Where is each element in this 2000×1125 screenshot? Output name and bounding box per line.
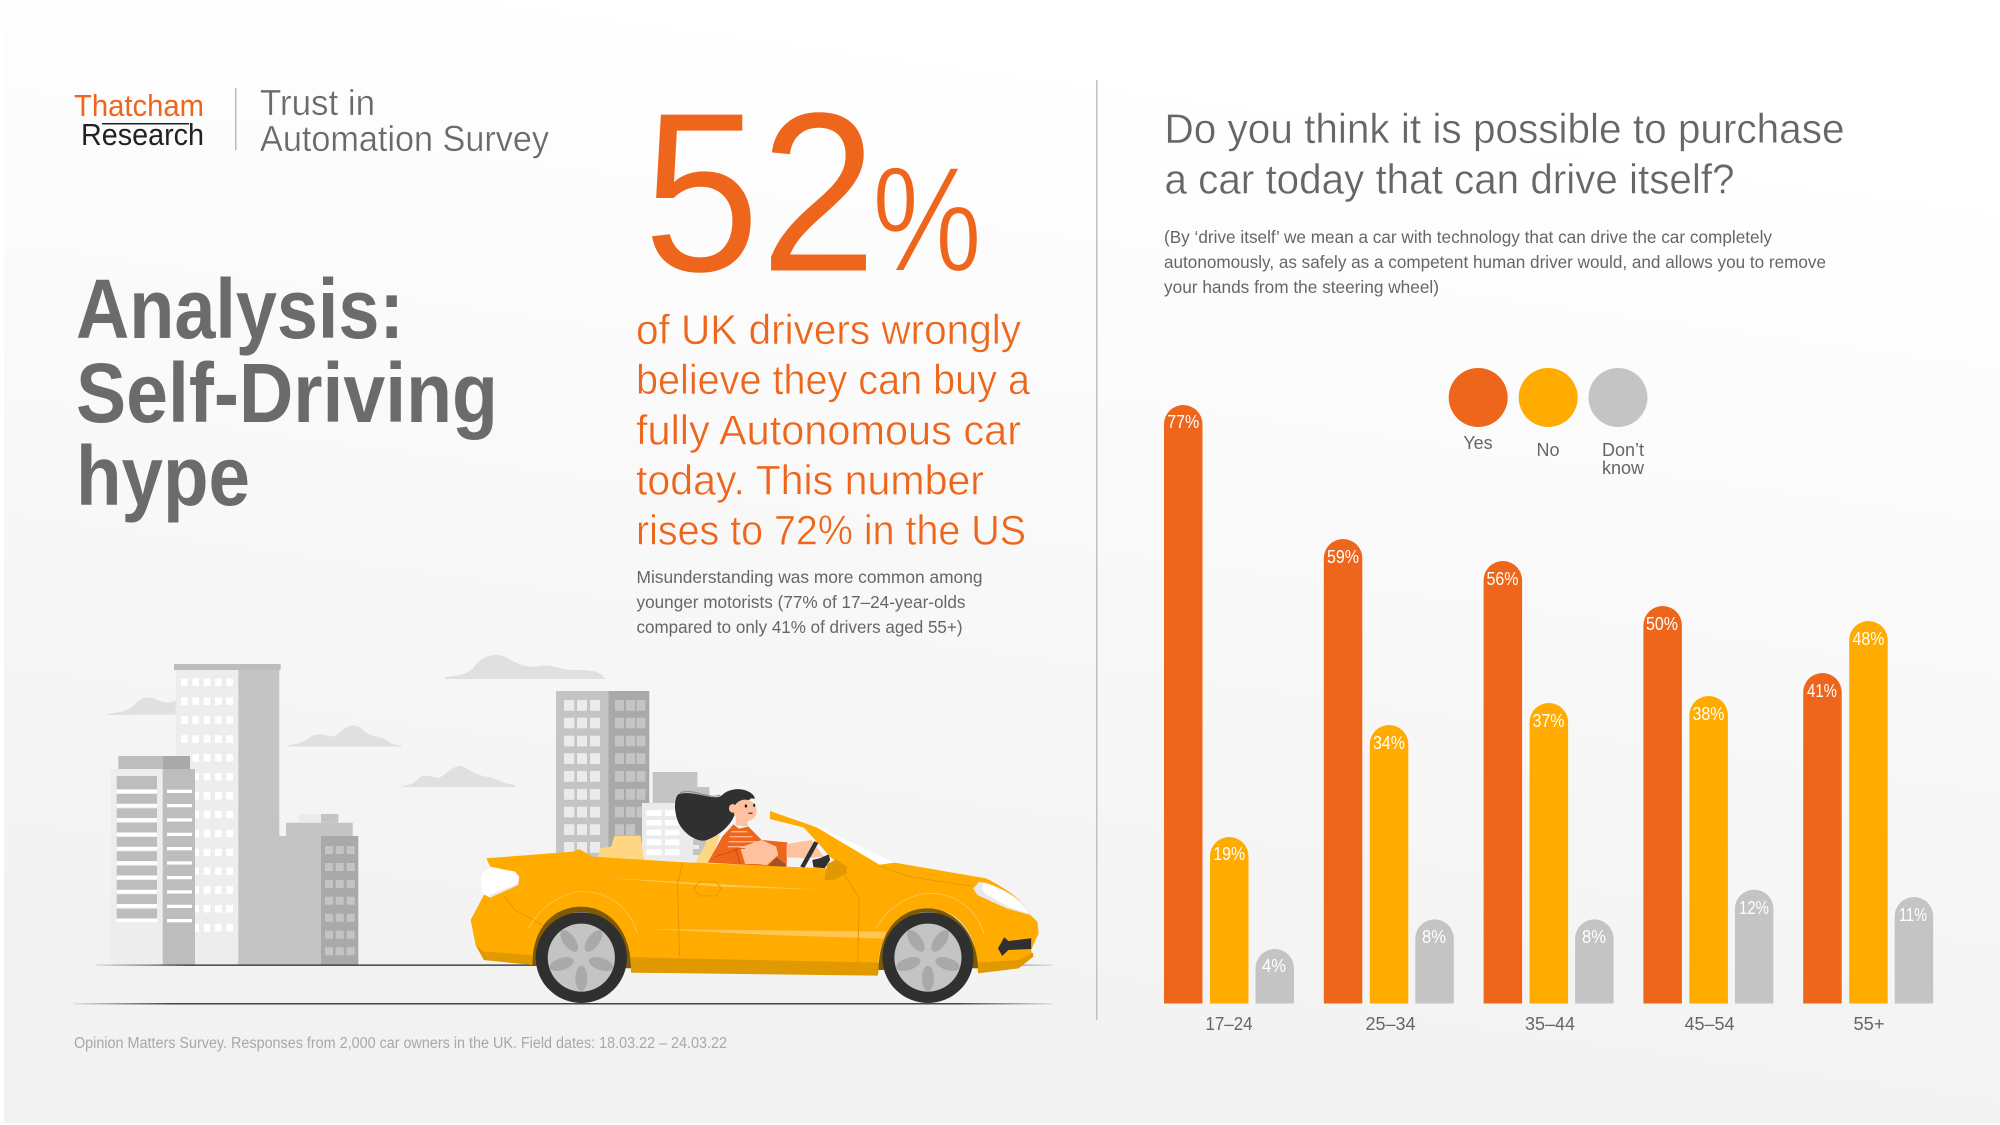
heading: Analysis Self-Driving hype: Self-Driving: [76, 346, 498, 440]
age group 17–24: [1164, 405, 1294, 1034]
key statement: today. This number: [636, 456, 984, 504]
age group 25–34: 59%: [1327, 547, 1359, 567]
legend: No: [1536, 440, 1560, 460]
heading: Analysis Self-Driving hype: [76, 262, 498, 523]
age group 35–44: 37%: [1532, 711, 1564, 731]
question explanation: your hands from the steering wheel): [1164, 277, 1439, 297]
key statement: [636, 306, 1031, 554]
legend: Yes: [1463, 433, 1493, 453]
age group 35–44: 35–44: [1525, 1014, 1575, 1034]
age group 17–24: 17–24: [1206, 1014, 1252, 1034]
left building: [111, 756, 195, 965]
age group 45–54: 12%: [1739, 898, 1769, 918]
right low building: [279, 814, 358, 965]
buildings behind car: [556, 691, 710, 863]
supporting text: [636, 567, 982, 637]
key statement: rises to 72% in the US: [636, 506, 1026, 554]
seats: [598, 835, 720, 864]
key statement: fully Autonomous car: [636, 406, 1021, 454]
age group 55+: 48%: [1852, 629, 1884, 649]
legend: [1449, 368, 1648, 478]
age group 45–54: 50%: [1646, 614, 1678, 634]
heading: Analysis Self-Driving hype: Analysis:: [76, 262, 404, 356]
age group 17–24: 19%: [1213, 844, 1245, 864]
footer source note: Opinion Matters Survey. Responses from 2,000 car owners in the UK. Field dates: 18.03.22 – 24.03.22: [74, 1035, 727, 1052]
age group 35–44: 56%: [1486, 569, 1518, 589]
key statement: of UK drivers wrongly: [636, 306, 1021, 353]
survey title: Automation Survey: [260, 118, 549, 159]
age group 25–34: 25–34: [1366, 1014, 1416, 1034]
road lines: [74, 964, 1053, 1004]
logo: Thatcham Research: [74, 88, 204, 152]
heading: Analysis Self-Driving hype: hype: [76, 429, 250, 523]
age group 17–24: 4%: [1262, 956, 1286, 976]
big number: 52%: %: [872, 135, 982, 303]
survey question: [1164, 105, 1844, 202]
white glass: [814, 825, 894, 865]
age group 55+: [1803, 621, 1933, 1034]
age group 45–54: [1643, 606, 1773, 1034]
bar chart: [1164, 405, 1933, 1034]
age group 35–44: 8%: [1582, 927, 1606, 947]
survey question: Do you think it is possible to purchase: [1164, 105, 1844, 152]
age group 25–34: 34%: [1373, 733, 1405, 753]
key statement: believe they can buy a: [636, 356, 1031, 403]
supporting text: Misunderstanding was more common among: [636, 567, 982, 587]
logo: Thatcham Research: Research: [81, 117, 204, 152]
legend: Don’t: [1602, 440, 1644, 460]
age group 55+: 55+: [1854, 1014, 1884, 1034]
age group 25–34: 8%: [1422, 927, 1446, 947]
question explanation: (By ‘drive itself’ we mean a car with technology that can drive the car completely: [1164, 227, 1772, 247]
age group 35–44: [1484, 561, 1614, 1034]
age group 25–34: [1324, 539, 1454, 1034]
car body: [471, 849, 1039, 975]
age group 55+: 11%: [1899, 905, 1927, 925]
supporting text: compared to only 41% of drivers aged 55+): [636, 617, 962, 637]
question explanation: autonomously, as safely as a competent human driver would, and allows you to remove: [1164, 252, 1826, 272]
illustration: yellow car with driver: [471, 789, 1039, 1003]
survey title: [260, 82, 549, 159]
front wheel: [882, 912, 974, 1003]
age group 45–54: 45–54: [1684, 1014, 1734, 1034]
age group 55+: 41%: [1807, 681, 1837, 701]
survey question: a car today that can drive itself?: [1164, 156, 1734, 202]
logo: Thatcham Research: Thatcham: [74, 88, 204, 123]
windshield frame: [770, 811, 880, 871]
tall building: [174, 664, 281, 965]
illustration: city skyline: [107, 655, 710, 965]
survey title: Trust in: [260, 82, 375, 123]
question explanation: [1164, 227, 1826, 297]
supporting text: younger motorists (77% of 17–24-year-olds: [636, 592, 966, 612]
age group 45–54: 38%: [1692, 704, 1724, 724]
car details: [476, 859, 1033, 976]
icon: clouds: [107, 655, 605, 787]
big number: 52%: 52: [643, 66, 877, 320]
driver: [675, 789, 830, 868]
rear wheel: [536, 912, 627, 1003]
age group 17–24: 77%: [1167, 412, 1199, 432]
legend: know: [1602, 458, 1645, 478]
